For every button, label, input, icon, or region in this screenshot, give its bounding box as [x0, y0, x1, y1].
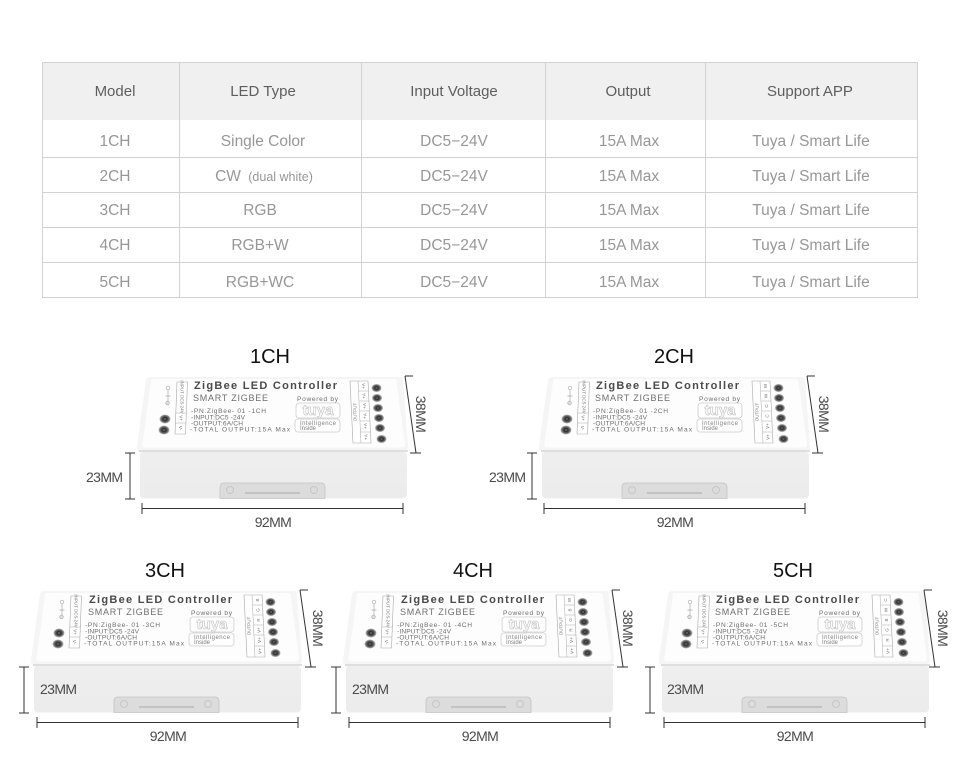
device: 1CH controller box: V+ [178, 415, 184, 421]
row 5CH: Tuya / Smart Life [752, 274, 870, 291]
device: 1CH controller box: +A [362, 413, 368, 419]
device: 4CH controller box: INPUT DC5-24V [386, 594, 390, 628]
device: 5CH controller box: V- [700, 640, 705, 645]
row 5CH: DC5−24V [420, 274, 488, 291]
row 4CH: 15A Max [599, 237, 659, 254]
device: 1CH controller box: +A [363, 423, 368, 429]
device: 2CH controller box: SMART ZIGBEE [595, 393, 670, 403]
device: 3CH controller box: R [256, 618, 261, 622]
dimension: 92MM: 92MM [150, 728, 186, 744]
device: 1CH controller box: ZigBee LED Controller [194, 380, 338, 392]
row 2CH values: Tuya / Smart Life [752, 168, 870, 185]
device: 2CH controller box: Inside [702, 426, 719, 432]
device: 2CH controller box: -INPUT:DC5 -24V [593, 414, 648, 422]
device: 2CH controller box: V- [580, 426, 585, 431]
device: 3CH controller box: V+ [257, 637, 262, 643]
panel: 2CH controller [489, 346, 832, 530]
device: 4CH controller box: W [567, 597, 572, 602]
device: 2CH controller box: -TOTAL OUTPUT:15A Max [592, 426, 693, 434]
device: 3CH controller box: INPUT DC5-24V [74, 594, 78, 628]
device: 1CH controller box: -TOTAL OUTPUT:15A Max [190, 426, 291, 434]
table header: Output [605, 83, 651, 100]
row 2CH values [99, 168, 870, 185]
dimension: 38MM: 38MM [816, 396, 832, 432]
row 1CH: 1CH [99, 133, 131, 150]
row 1CH: Tuya / Smart Life [752, 133, 870, 150]
table header: LED Type [230, 83, 296, 100]
device: 5CH controller box: Powered by [819, 610, 861, 617]
device: 5CH controller box: V+ [886, 648, 890, 654]
dimension: 92MM: 92MM [777, 728, 813, 744]
device: 4CH controller box: Intelligence [506, 635, 543, 641]
dimension: 38MM [924, 590, 951, 667]
heading: 5CH: 5CH [773, 560, 813, 582]
panel: 3CH controller [19, 560, 326, 744]
panel: 5CH controller [645, 560, 951, 744]
device: 5CH controller box: OUTPUT [874, 616, 880, 635]
dimension: 23MM [489, 453, 537, 499]
device: 1CH controller box: V- [178, 426, 183, 431]
panel: 1CH controller [86, 346, 429, 530]
dimension: 92MM [142, 503, 403, 530]
table [42, 62, 918, 298]
dimension: 38MM [807, 376, 832, 453]
device: 2CH controller box: V+ [765, 423, 770, 429]
device: 3CH controller box: -INPUT:DC5 -24V [85, 628, 140, 636]
row 5CH [99, 274, 870, 291]
device: 1CH controller box: +A [362, 403, 367, 409]
device: 4CH controller box: Inside [506, 640, 523, 646]
device: 2CH controller box: -PN:ZigBee- 01 -2CH [593, 408, 668, 415]
table header: Model [95, 83, 135, 100]
dimension: 92MM [349, 717, 610, 744]
device: 3CH controller box: Powered by [191, 610, 233, 617]
row 3CH: RGB [243, 202, 277, 219]
dimension: 23MM [19, 667, 76, 713]
device: 3CH controller box: Intelligence [194, 635, 231, 641]
device: 2CH controller box: OUTPUT [754, 402, 760, 421]
device: 3CH controller box: B [255, 598, 260, 602]
dimension: 23MM [331, 667, 388, 713]
row 3CH: 3CH [99, 202, 131, 219]
dimension: 38MM: 38MM [310, 610, 326, 646]
device: 3CH controller box: V+ [72, 629, 78, 635]
device: 4CH controller box: V+ [569, 637, 574, 643]
device: 3CH controller box: OUTPUT [246, 616, 252, 635]
row 5CH: RGB+WC [226, 274, 294, 291]
dimension: 38MM: 38MM [620, 610, 636, 646]
device: 5CH controller box: R [885, 638, 890, 642]
device: 5CH controller box: tuya [825, 616, 856, 633]
device: 2CH controller box: Intelligence [702, 421, 739, 427]
device: 5CH controller box: G [884, 628, 890, 632]
dimension: 38MM: 38MM [413, 396, 429, 432]
device: 3CH controller box: V+ [256, 627, 262, 633]
dimension: 92MM: 92MM [462, 728, 498, 744]
device: 2CH controller box: tuya [705, 402, 736, 419]
device: 4CH controller box: ZigBee LED Controller [401, 594, 545, 606]
row 3CH: DC5−24V [420, 202, 488, 219]
row 5CH: 5CH [99, 274, 131, 291]
device: 4CH controller box: SMART ZIGBEE [400, 607, 475, 617]
device: 3CH controller box: V- [72, 640, 77, 645]
row 5CH: 15A Max [599, 274, 659, 291]
dimension: 23MM [86, 453, 135, 499]
device: 1CH controller box: Intelligence [300, 421, 337, 427]
row 3CH [99, 202, 870, 219]
device: 1CH controller box: -OUTPUT:6A/CH [191, 420, 243, 428]
device: 3CH controller box [31, 591, 302, 712]
heading: 2CH: 2CH [654, 346, 694, 368]
device: 2CH controller box: V+ [766, 434, 770, 440]
device: 3CH controller box: -TOTAL OUTPUT:15A Max [84, 640, 185, 648]
dimension: 23MM [645, 667, 704, 713]
dimension: 38MM: 38MM [935, 610, 951, 646]
dimension: 23MM: 23MM [352, 681, 388, 697]
table header: Input Voltage [410, 83, 498, 100]
device: 5CH controller box: INPUT DC5-24V [702, 594, 706, 628]
table header: Support APP [767, 83, 853, 100]
device: 4CH controller box: -INPUT:DC5 -24V [397, 628, 452, 636]
device: 4CH controller box: V+ [570, 648, 574, 654]
device: 3CH controller box: V+ [258, 648, 262, 654]
heading: 4CH: 4CH [453, 560, 493, 582]
device: 3CH controller box: ZigBee LED Controller [89, 594, 233, 606]
device: 5CH controller box: W [884, 607, 888, 612]
device: 1CH controller box: INPUT DC5-24V [180, 380, 184, 414]
row 4CH: RGB+W [231, 237, 289, 254]
device: 4CH controller box: V- [384, 640, 389, 645]
dimension: 92MM: 92MM [255, 514, 291, 530]
device: 5CH controller box [659, 591, 930, 712]
device: 5CH controller box: -INPUT:DC5 -24V [713, 628, 768, 636]
device: 3CH controller box: SMART ZIGBEE [88, 607, 163, 617]
dimension: 92MM [664, 717, 925, 744]
device: 3CH controller box: tuya [197, 616, 228, 633]
device: 3CH controller box: Inside [194, 640, 211, 646]
device: 5CH controller box: -OUTPUT:6A/CH [713, 634, 765, 642]
row 4CH: DC5−24V [420, 237, 488, 254]
row 4CH [99, 237, 870, 254]
device: 4CH controller box: -OUTPUT:6A/CH [397, 634, 449, 642]
device: 5CH controller box: B [884, 618, 889, 622]
device: 4CH controller box: OUTPUT [558, 616, 564, 635]
device: 3CH controller box: -PN:ZigBee- 01 -3CH [85, 622, 160, 629]
device: 2CH controller box: V+ [580, 415, 586, 421]
device: 4CH controller box: -PN:ZigBee- 01 -4CH [397, 622, 472, 629]
row 1CH: 15A Max [599, 133, 659, 150]
device: 1CH controller box: +A [361, 383, 366, 389]
device: 5CH controller box: V+ [700, 629, 706, 635]
device: 4CH controller box: B [568, 608, 572, 612]
device: 4CH controller box: R [568, 628, 574, 632]
table header [95, 83, 853, 100]
device: 4CH controller box: G [568, 618, 573, 622]
panel: 4CH controller [331, 560, 636, 744]
row 2CH values: 15A Max [599, 168, 659, 185]
device: 2CH controller box: Powered by [699, 396, 741, 403]
device: 1CH controller box: OUTPUT [352, 402, 358, 421]
dimension: 92MM: 92MM [657, 514, 693, 530]
heading: 3CH: 3CH [145, 560, 185, 582]
device: 1CH controller box [137, 377, 408, 498]
device: 5CH controller box: SMART ZIGBEE [715, 607, 790, 617]
device: 5CH controller box: ZigBee LED Controller [716, 594, 860, 606]
device: 2CH controller box: W [763, 383, 768, 388]
device: 1CH controller box: -INPUT:DC5 -24V [191, 414, 246, 422]
dimension: 23MM: 23MM [86, 469, 122, 485]
device: 1CH controller box: Powered by [297, 396, 339, 403]
device: 2CH controller box [539, 377, 810, 498]
device: 1CH controller box: SMART ZIGBEE [193, 393, 268, 403]
device: 1CH controller box: tuya [303, 402, 334, 419]
device: 4CH controller box: Powered by [503, 610, 545, 617]
row 4CH: 4CH [99, 237, 131, 254]
dimension: 92MM [544, 503, 805, 530]
dimension: 23MM: 23MM [40, 681, 76, 697]
device: 2CH controller box: W [764, 393, 768, 398]
device: 2CH controller box: C [764, 404, 769, 408]
row 4CH: Tuya / Smart Life [752, 237, 870, 254]
dimension: 38MM [300, 590, 326, 667]
device: 2CH controller box: INPUT DC5-24V [582, 380, 586, 414]
row 2CH values: DC5−24V [420, 168, 488, 185]
device: 2CH controller box: ZigBee LED Controller [596, 380, 740, 392]
row 3CH: 15A Max [599, 202, 659, 219]
device: 1CH controller box: -PN:ZigBee- 01 -1CH [191, 408, 266, 415]
row 2CH: CW (dual white) [215, 168, 313, 185]
device: 1CH controller box: +A [362, 393, 366, 399]
heading: 1CH: 1CH [250, 346, 290, 368]
device: 5CH controller box: -TOTAL OUTPUT:15A Max [712, 640, 813, 648]
dimension: 23MM: 23MM [489, 469, 526, 485]
device: 4CH controller box: -TOTAL OUTPUT:15A Max [396, 640, 497, 648]
dimension: 92MM [37, 717, 298, 744]
row 1CH: Single Color [221, 133, 305, 150]
device: 4CH controller box: tuya [509, 616, 540, 633]
device: 2CH controller box: -OUTPUT:6A/CH [593, 420, 645, 428]
device: 3CH controller box: G [256, 608, 260, 612]
device: 5CH controller box: Inside [822, 640, 839, 646]
row 1CH [99, 133, 870, 150]
row 2CH values: 2CH [99, 168, 131, 185]
device: 3CH controller box: -OUTPUT:6A/CH [85, 634, 137, 642]
device: 5CH controller box: Intelligence [822, 635, 859, 641]
dimension: 38MM [612, 590, 636, 667]
dimension: 38MM [405, 376, 429, 453]
row 1CH: DC5−24V [420, 133, 488, 150]
row 3CH: Tuya / Smart Life [752, 202, 870, 219]
device: 1CH controller box: +A [364, 434, 368, 440]
device: 2CH controller box: C [764, 414, 770, 418]
device: 5CH controller box: -PN:ZigBee- 01 -5CH [713, 622, 788, 629]
device: 4CH controller box [343, 591, 614, 712]
device: 5CH controller box: C [883, 598, 888, 602]
device: 4CH controller box: V+ [384, 629, 390, 635]
device: 1CH controller box: Inside [300, 426, 317, 432]
dimension: 23MM: 23MM [667, 681, 704, 697]
